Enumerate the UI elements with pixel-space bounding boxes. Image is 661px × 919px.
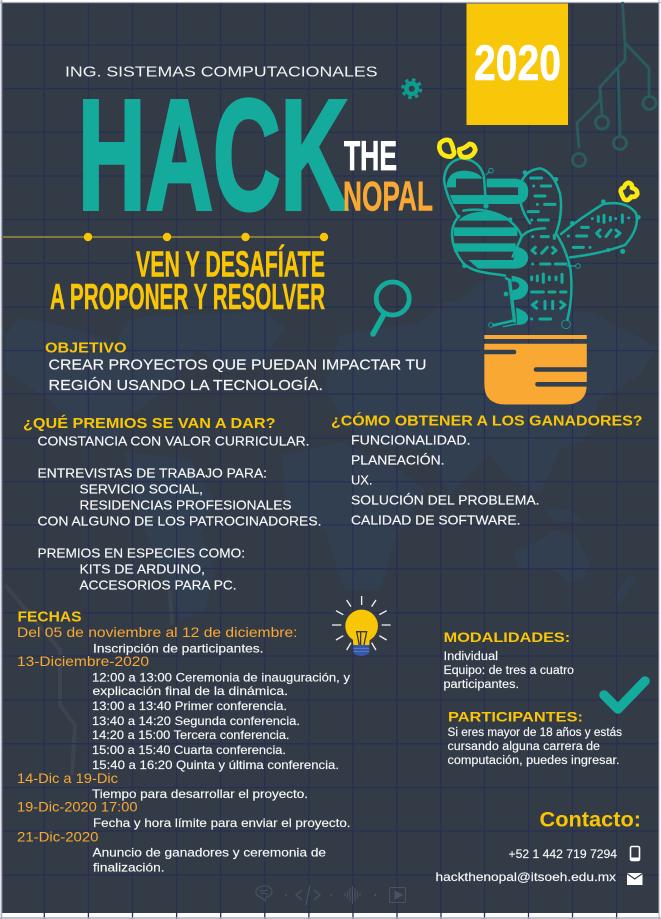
panel: fechas: 21-Dic-2020 <box>17 829 99 845</box>
panel: criterios: PLANEACIÓN. <box>351 452 444 467</box>
panel: premios: ENTREVISTAS DE TRABAJO PARA: <box>38 466 267 480</box>
panel: objetivo <box>45 341 426 394</box>
panel: fechas: Anuncio de ganadores y ceremonia de <box>92 845 326 859</box>
panel: fechas: 13:40 a 14:20 Segunda conferencia. <box>92 714 300 728</box>
panel: fechas: Inscripción de participantes. <box>93 641 264 655</box>
icon: gear <box>403 80 421 98</box>
panel: premios: PREMIOS EN ESPECIES COMO: <box>38 546 245 560</box>
panel: fechas: Fecha y hora límite para enviar el proyecto. <box>93 816 350 830</box>
cactus code marks <box>528 178 629 319</box>
panel: participantes: PARTICIPANTES: <box>448 709 583 725</box>
panel: objetivo: REGIÓN USANDO LA TECNOLOGÍA. <box>48 377 323 394</box>
dotted timeline divider <box>3 233 328 241</box>
department label: ING. SISTEMAS COMPUTACIONALES <box>65 64 378 80</box>
cactus stripe fills <box>447 171 528 325</box>
tagline: A PROPONER Y RESOLVER <box>50 276 325 317</box>
icon: code tag <box>296 885 320 905</box>
panel: premios: CON ALGUNO DE LOS PATROCINADORES. <box>38 514 322 528</box>
tagline <box>50 244 325 317</box>
footer icons <box>256 885 406 905</box>
panel: participantes: Si eres mayor de 18 años y estás <box>448 727 622 739</box>
panel: criterios: UX. <box>351 473 372 487</box>
panel: fechas: Del 05 de noviembre al 12 de diciembre: <box>17 624 298 640</box>
icon: circuit lines top right <box>572 2 656 166</box>
panel: participantes: computación, puedes ingresar. <box>448 755 620 767</box>
panel: participantes: cursando alguna carrera de <box>448 741 600 753</box>
panel: modalidades: Individual <box>444 651 498 663</box>
year badge: 2020 <box>474 35 561 91</box>
cactus outlines <box>444 158 637 327</box>
panel: fechas: 14:20 a 15:00 Tercera conferencia. <box>92 728 290 742</box>
icon: waveform <box>345 886 360 904</box>
panel: fechas: finalización. <box>93 860 164 874</box>
panel: fechas: 15:40 a 16:20 Quinta y última conferencia. <box>92 758 339 772</box>
panel: fechas: explicación final de la dinámica. <box>92 684 288 698</box>
panel: premios: CONSTANCIA CON VALOR CURRICULAR. <box>38 434 310 448</box>
panel: criterios: CALIDAD DE SOFTWARE. <box>351 513 520 527</box>
panel: modalidades: Equipo: de tres a cuatro <box>444 665 574 677</box>
panel: criterios: ¿CÓMO OBTENER A LOS GANADORES? <box>331 411 642 429</box>
panel: contacto: +52 1 442 719 7294 <box>508 847 617 861</box>
icon: phone <box>630 846 640 860</box>
cactus flowers <box>439 140 637 200</box>
panel: fechas: 13-Diciembre-2020 <box>17 653 149 669</box>
panel: contacto <box>436 809 642 885</box>
panel: criterios: FUNCIONALIDAD. <box>351 433 470 447</box>
icon: light bulb <box>332 596 391 656</box>
title: THE: THE <box>344 132 397 179</box>
panel: modalidades <box>444 629 574 691</box>
panel: modalidades: MODALIDADES: <box>444 629 570 645</box>
title: HACK: HACK <box>78 68 348 243</box>
panel: fechas <box>17 609 350 874</box>
world map background <box>5 275 658 620</box>
panel: contacto: hackthenopal@itsoeh.edu.mx <box>436 870 616 884</box>
panel: objetivo: CREAR PROYECTOS QUE PUEDAN IMPACTAR TU <box>48 358 426 374</box>
panel: premios: RESIDENCIAS PROFESIONALES <box>80 498 292 512</box>
panel: contacto: Contacto: <box>540 809 641 832</box>
panel: fechas: 15:00 a 15:40 Cuarta conferencia. <box>92 743 286 757</box>
panel: premios: SERVICIO SOCIAL, <box>80 482 203 496</box>
icon: envelope <box>627 873 642 885</box>
title: NOPAL: NOPAL <box>343 172 433 220</box>
icon: flower pot <box>482 335 590 404</box>
tagline: VEN Y DESAFÍATE <box>136 244 325 284</box>
icon: cactus illustration <box>439 140 641 329</box>
panel: fechas: Tiempo para desarrollar el proyecto. <box>92 787 308 801</box>
panel: fechas: 14-Dic a 19-Dic <box>17 770 118 786</box>
panel: premios: ¿QUÉ PREMIOS SE VAN A DAR? <box>23 415 276 432</box>
icon: play box <box>390 888 406 902</box>
panel: premios: ACCESORIOS PARA PC. <box>80 578 236 592</box>
panel: criterios: SOLUCIÓN DEL PROBLEMA. <box>351 492 540 507</box>
year badge <box>466 4 568 125</box>
panel: criterios <box>331 411 642 527</box>
cactus thin circles <box>489 168 580 329</box>
panel: fechas: 13:00 a 13:40 Primer conferencia. <box>92 699 287 713</box>
panel: fechas: FECHAS <box>18 609 82 626</box>
panel: fechas: 12:00 a 13:00 Ceremonia de inauguración, y <box>92 670 350 684</box>
faint background circuit <box>5 585 172 775</box>
panel: fechas: 19-Dic-2020 17:00 <box>17 799 138 815</box>
panel: premios <box>23 415 322 592</box>
icon: magnifier <box>373 282 409 334</box>
panel: premios: KITS DE ARDUINO, <box>80 562 205 576</box>
cactus dots <box>462 170 641 296</box>
icon: brain <box>256 886 272 901</box>
panel: objetivo: OBJETIVO <box>45 341 126 357</box>
panel: modalidades: participantes. <box>444 679 519 691</box>
icon: check mark <box>604 681 645 709</box>
panel: participantes <box>448 709 622 767</box>
